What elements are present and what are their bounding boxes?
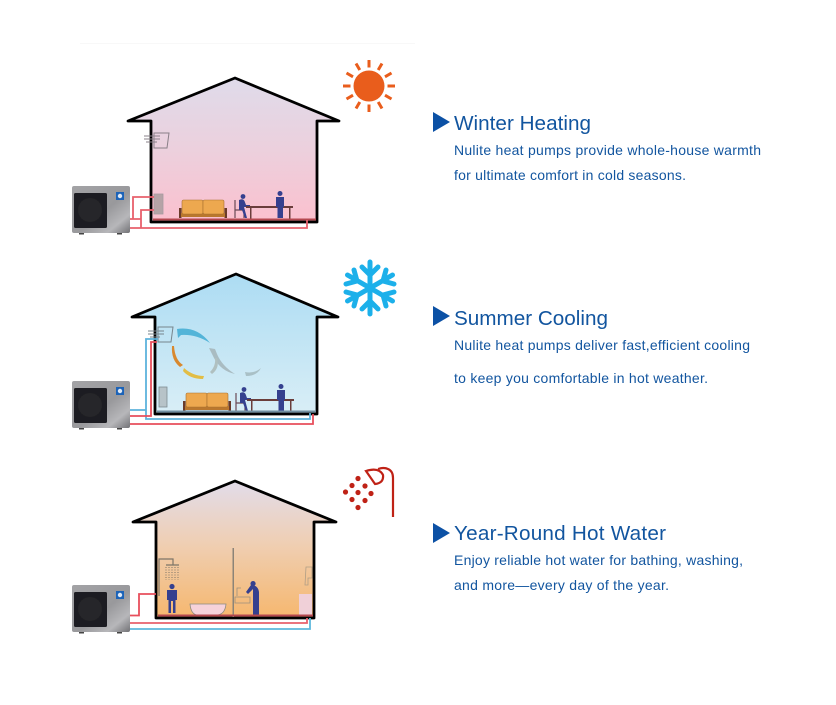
floor heating bbox=[153, 218, 316, 220]
panel: summer cooling illustration bbox=[72, 262, 394, 430]
partition bbox=[232, 548, 234, 617]
panel: hot water illustration bbox=[72, 468, 393, 634]
person showering bbox=[167, 584, 177, 613]
description: Nulite heat pumps deliver fast,efficient cooling bbox=[454, 337, 750, 353]
house outline winter bbox=[128, 78, 339, 222]
floor bbox=[158, 614, 313, 616]
panel: hot water text bbox=[433, 522, 743, 593]
panel: summer cooling text bbox=[433, 306, 750, 386]
panel: hot water text: and more—every day of the year. bbox=[454, 577, 669, 593]
house outline summer bbox=[132, 274, 338, 414]
icon: snowflake bbox=[346, 262, 394, 314]
radiator bbox=[159, 387, 167, 407]
heading: Year-Round Hot Water bbox=[454, 522, 666, 545]
people and table bbox=[235, 191, 293, 219]
description: Enjoy reliable hot water for bathing, washing, bbox=[454, 552, 743, 568]
washing person bbox=[246, 581, 259, 615]
sofa bbox=[183, 393, 231, 411]
indoor air unit bbox=[144, 133, 169, 148]
people and table bbox=[236, 384, 294, 412]
arrow bbox=[433, 112, 450, 132]
panel: winter heating illustration bbox=[72, 60, 395, 234]
sink bbox=[235, 588, 250, 603]
outdoor unit bbox=[72, 381, 130, 430]
panel: summer cooling text: to keep you comfortable in hot weather. bbox=[454, 370, 708, 386]
faint top rule bbox=[80, 43, 415, 44]
pipes bbox=[130, 339, 313, 424]
indoor air unit bbox=[148, 327, 173, 342]
icon: sun bbox=[343, 60, 395, 112]
heading: Winter Heating bbox=[454, 112, 591, 135]
vanity bbox=[299, 594, 312, 616]
bathtub bbox=[190, 604, 226, 615]
shower bbox=[159, 559, 179, 596]
panel: winter heating text: for ultimate comfort in cold seasons. bbox=[454, 167, 686, 183]
mirror bbox=[305, 567, 312, 585]
airflow arrows bbox=[172, 329, 261, 379]
panel: winter heating text bbox=[433, 112, 761, 183]
pipes bbox=[130, 594, 310, 629]
arrow bbox=[433, 306, 450, 326]
radiator bbox=[154, 194, 163, 214]
outdoor unit bbox=[72, 186, 130, 234]
outdoor unit bbox=[72, 585, 130, 634]
description: Nulite heat pumps provide whole-house warmth bbox=[454, 142, 761, 158]
arrow bbox=[433, 523, 450, 543]
sofa bbox=[179, 200, 227, 218]
house outline hot water bbox=[133, 481, 336, 618]
pipes bbox=[130, 197, 307, 228]
heading: Summer Cooling bbox=[454, 307, 608, 330]
icon: shower head bbox=[343, 468, 393, 517]
floor bbox=[157, 410, 316, 412]
